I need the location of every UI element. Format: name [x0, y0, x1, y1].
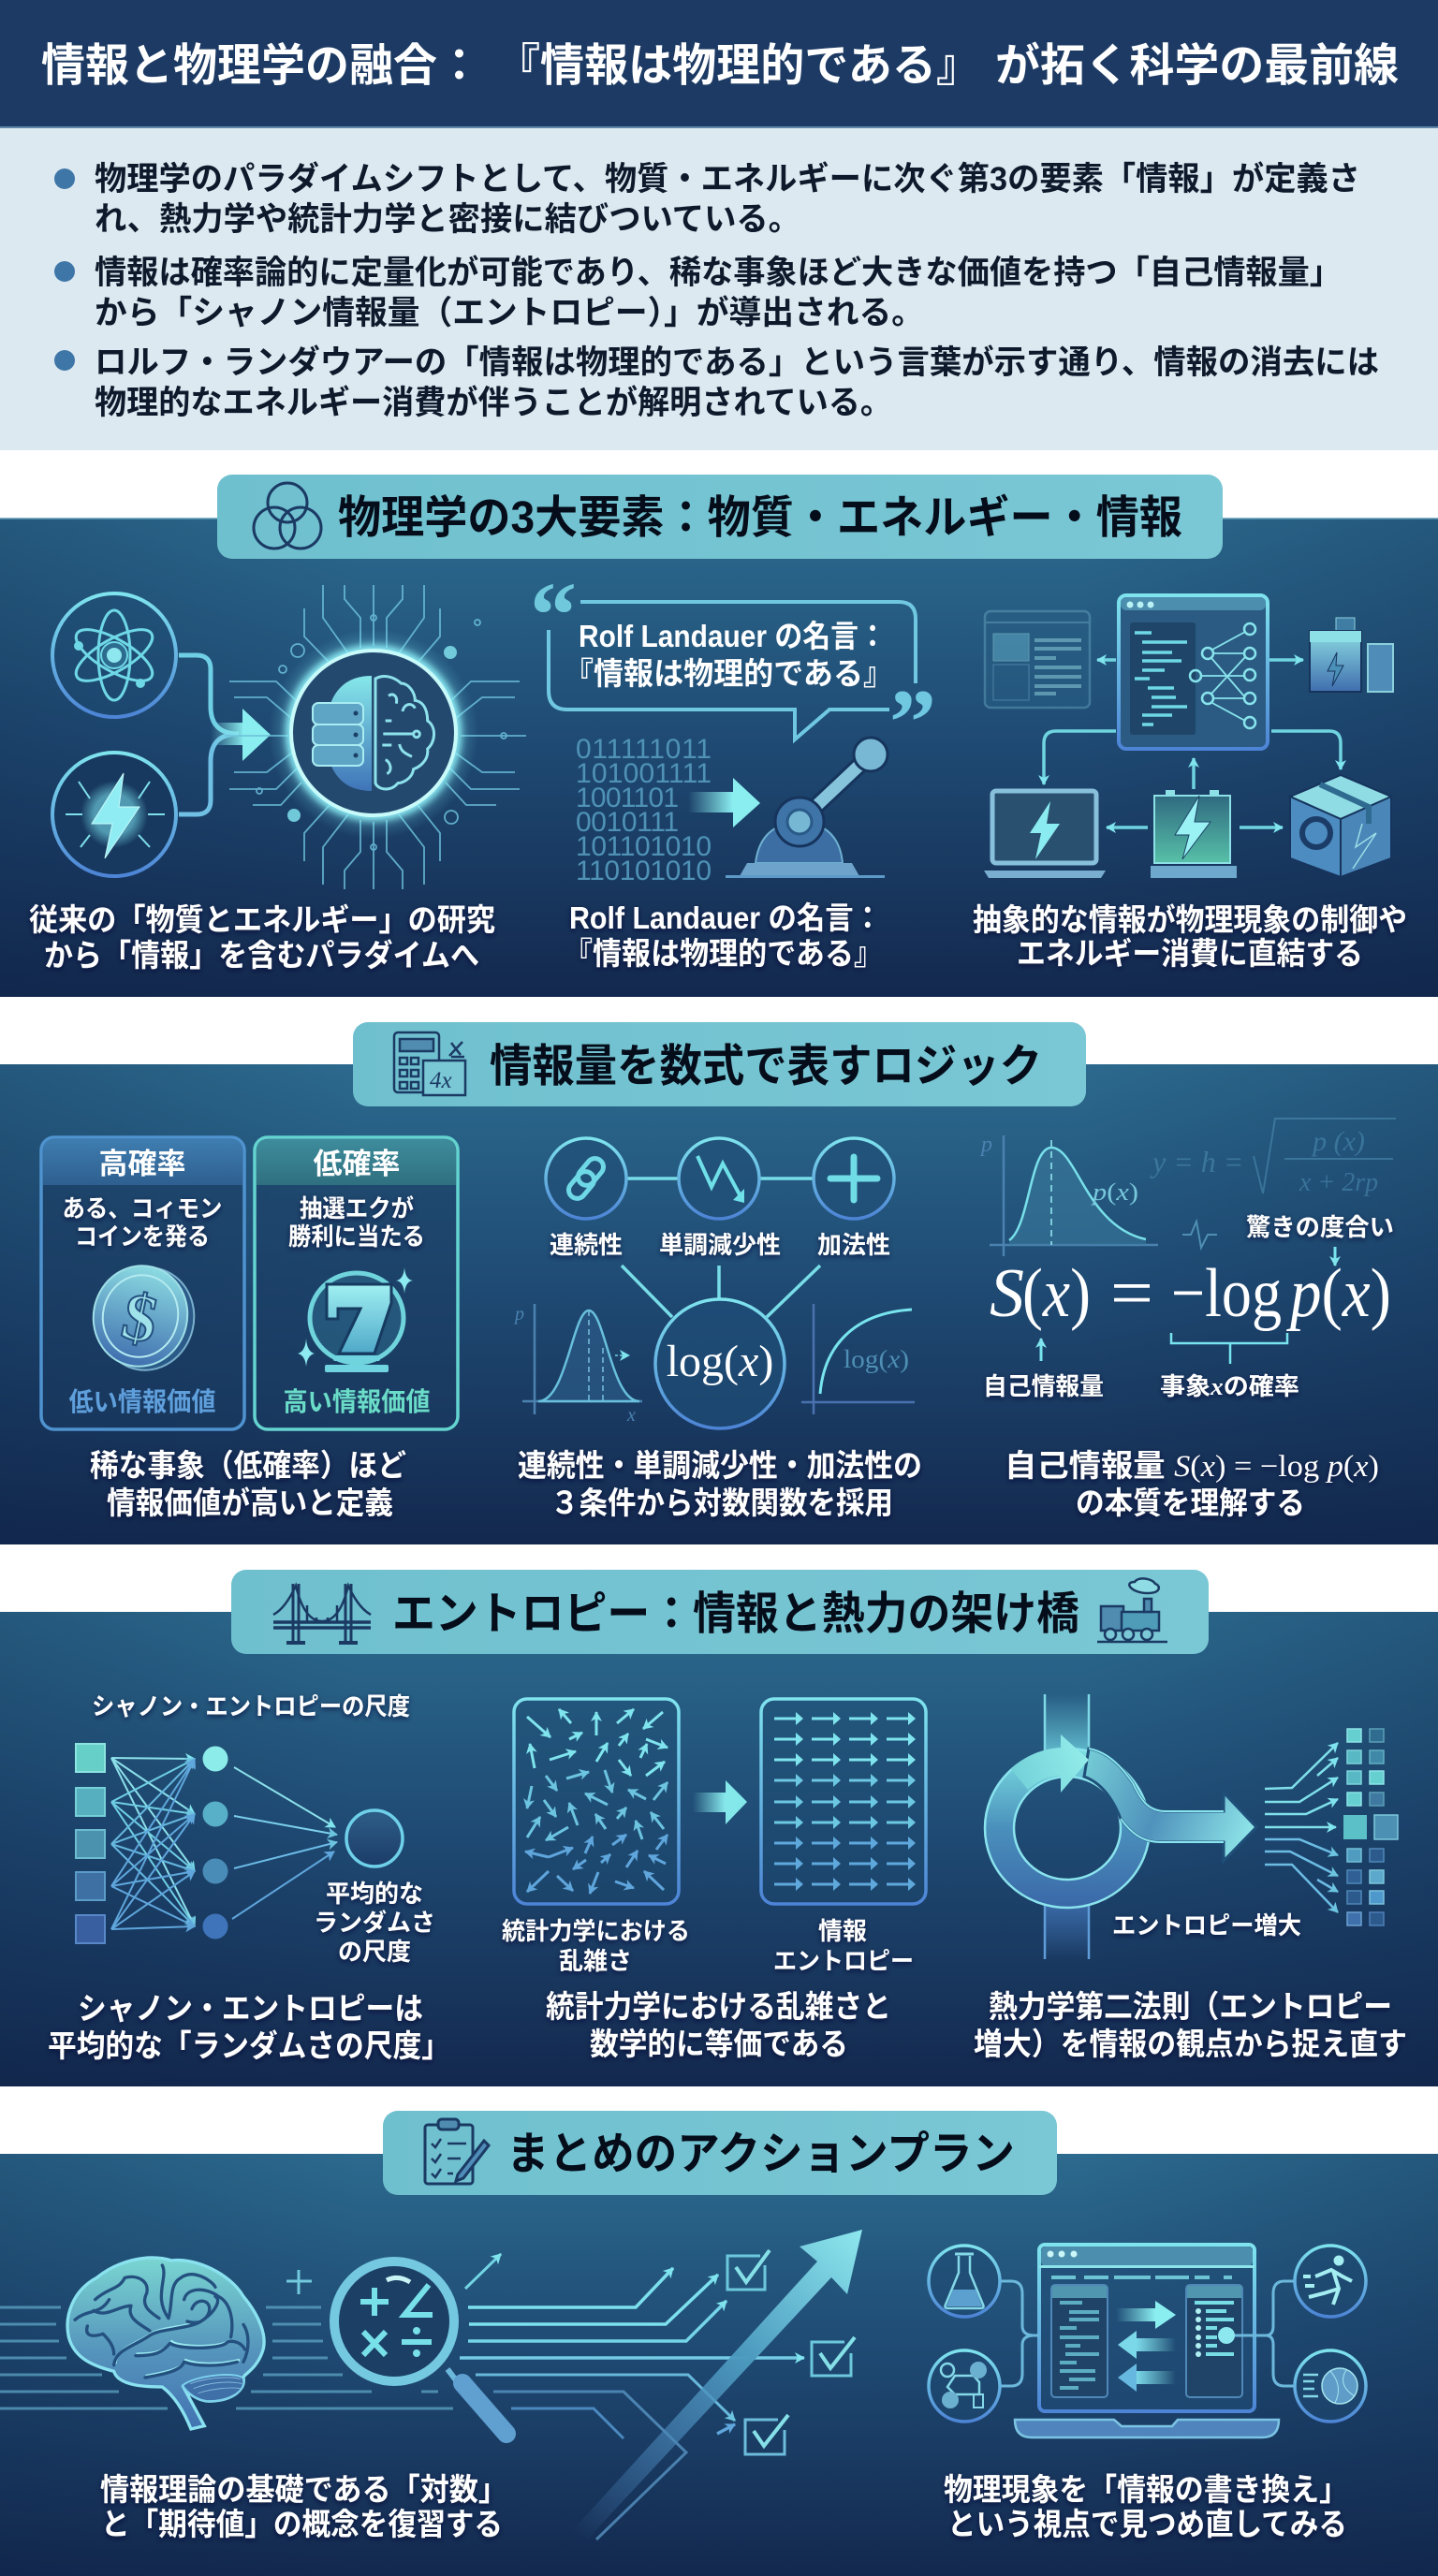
- box: ordered arrows: [761, 1699, 926, 1904]
- caption: equivalence: [546, 1989, 891, 2061]
- bullet 1: [54, 160, 1360, 238]
- section 2 heading pill: [353, 1022, 1086, 1106]
- caption: Shannon entropy: シャノン・エントロピーは: [78, 1991, 423, 2026]
- circuit traces around brain: [225, 585, 526, 889]
- arrow: binary to lever: [688, 778, 760, 827]
- box labels: [502, 1917, 914, 1975]
- chart: bell curve: p: [513, 1304, 524, 1325]
- chart: log curve: log(x): [844, 1345, 909, 1373]
- icon: additive condition: [814, 1138, 894, 1219]
- arrow: surprise to formula: [1333, 1247, 1337, 1266]
- main formula: [990, 1255, 1391, 1332]
- vertical pipes: [1045, 1694, 1089, 1959]
- icon: broken cardboard box: [1290, 775, 1391, 877]
- card description: [288, 1194, 425, 1251]
- bullet 1: 物理学のパラダイムシフトとして、物質・エネルギーに次ぐ第3の要素「情報」が定義さ: [95, 160, 1360, 198]
- icon: molecule circle: [929, 2350, 1000, 2422]
- caption: review log and expectation: [100, 2472, 507, 2541]
- icon: energy lightning circle: [52, 753, 176, 876]
- caption: rewrite viewpoint: [944, 2472, 1348, 2541]
- chart: probability density: p(x): [1091, 1178, 1138, 1206]
- caption: card comparison: [90, 1448, 406, 1520]
- ring exit band: [1084, 1749, 1256, 1861]
- caption: column 2: [564, 900, 883, 971]
- binary digits block: [576, 734, 712, 886]
- icon: magnifying glass with math symbols: [334, 2261, 506, 2434]
- title: [41, 41, 1399, 91]
- diagram: self-information formula: [979, 1119, 1396, 1400]
- caption: log conditions: 連続性・単調減少性・加法性の: [518, 1448, 922, 1483]
- binary digits block: 0010111: [576, 807, 679, 838]
- panel: section 3: [0, 1570, 1438, 2086]
- chart: probability density: p: [979, 1133, 992, 1157]
- title: が拓く科学の最前線: [995, 41, 1399, 91]
- main formula: S: [990, 1255, 1024, 1332]
- output node label: [314, 1880, 435, 1966]
- section 3 heading text: エントロピー：情報と熱力の架け橋: [392, 1589, 1079, 1639]
- caption: column 1: から「情報」を含むパラダイムへ: [44, 938, 479, 973]
- caption: log conditions: ３条件から対数関数を採用: [550, 1486, 893, 1520]
- card: low probability: [255, 1137, 458, 1429]
- icon: laptop rewriting information: [1015, 2245, 1279, 2437]
- caption: Shannon entropy: [48, 1991, 450, 2063]
- binary digits block: 011111011: [576, 734, 712, 765]
- hidden-layer nodes: [202, 1747, 228, 1939]
- caption: card comparison: 情報価値が高いと定義: [107, 1486, 393, 1520]
- icon: brain and database core: [269, 629, 478, 839]
- chart: probability density: [979, 1133, 1158, 1256]
- card: high probability: [41, 1137, 244, 1429]
- callout: speech bubble with quote: 『情報は物理的である』: [564, 656, 893, 691]
- binary digits block: 101001111: [576, 758, 712, 789]
- icon: runner circle: [1295, 2246, 1366, 2317]
- right code pane: [1186, 2285, 1242, 2397]
- page header band: [0, 0, 1438, 128]
- section 3 heading pill: [231, 1570, 1209, 1654]
- icon: laptop with lightning: [984, 791, 1106, 878]
- arrow: left lower: [1118, 2364, 1176, 2392]
- icon: erasure lever: [726, 738, 888, 878]
- caption: rewrite viewpoint: という視点で見つめ直してみる: [947, 2507, 1347, 2541]
- icon: decreasing condition: [679, 1138, 759, 1219]
- caption: column 3: エネルギー消費に直結する: [1017, 936, 1363, 971]
- icon: brain: [67, 2258, 264, 2429]
- section 2 heading text: 情報量を数式で表すロジック: [490, 1042, 1042, 1091]
- arrow: small upward: [465, 2254, 501, 2289]
- icon: atom circle: [52, 593, 176, 717]
- chart: bell curve: [513, 1304, 642, 1426]
- main formula: (x): [1022, 1255, 1091, 1332]
- faded background formula: p (x): [1311, 1126, 1365, 1157]
- icon: coin: $: [116, 1278, 165, 1358]
- panel: summary bullets: [0, 128, 1438, 450]
- network title: シャノン・エントロピーの尺度: [92, 1692, 410, 1720]
- icon: opening quote mark: “: [530, 563, 577, 666]
- section 1 heading text: 物理学の3大要素：物質・エネルギー・情報: [338, 493, 1182, 543]
- card description: 抽選エクが: [300, 1194, 414, 1222]
- arrows: data flow from window: [1044, 660, 1341, 827]
- caption: column 3: 抽象的な情報が物理現象の制御や: [973, 902, 1407, 937]
- ring: [985, 1749, 1150, 1908]
- caption: column 1: [29, 902, 495, 973]
- formula labels: [983, 1372, 1299, 1400]
- card heading: 高確率: [99, 1148, 185, 1180]
- icon: clipboard and pencil: [425, 2119, 489, 2184]
- arrow: left upper: [1118, 2331, 1176, 2359]
- arrows: full mesh: [111, 1758, 337, 1929]
- icon: check box 2: [812, 2337, 855, 2376]
- card description: [62, 1194, 223, 1251]
- condition labels: 単調減少性: [659, 1231, 781, 1259]
- fan-out arrows: [1265, 1743, 1338, 1912]
- log circle: log(x): [667, 1337, 773, 1386]
- icon: chain link condition: [546, 1138, 626, 1219]
- icon: main code window: [1119, 595, 1268, 749]
- caption: second law: 増大）を情報の観点から捉え直す: [974, 2027, 1407, 2061]
- icon: closing quote mark: ”: [889, 670, 936, 774]
- panel: section 2: [0, 1022, 1438, 1544]
- caption: self-information: [1005, 1448, 1379, 1520]
- bullet 3: [54, 344, 1379, 421]
- input squares: [76, 1744, 105, 1943]
- caption: log conditions: [518, 1448, 922, 1520]
- bracket: probability: [1171, 1333, 1287, 1364]
- icon: steam train: [1097, 1578, 1167, 1642]
- card description: 勝利に当たる: [288, 1222, 425, 1251]
- caption: review log and expectation: と「期待値」の概念を復習する: [101, 2507, 503, 2541]
- particle squares: [1343, 1729, 1398, 1925]
- chart: bell curve: x: [626, 1405, 636, 1426]
- caption: column 3: [973, 902, 1407, 971]
- caption: Shannon entropy: 平均的な「ランダムさの尺度」: [48, 2028, 450, 2063]
- card value label: 高い情報価値: [283, 1387, 431, 1416]
- arrow: disorder to order: [693, 1780, 747, 1824]
- arrow: big growth arrow: [571, 2230, 862, 2539]
- caption: second law: 熱力学第二法則（エントロピー: [989, 1989, 1392, 2024]
- main formula: −log: [1171, 1255, 1282, 1332]
- diagram: three conditions to log: [513, 1138, 915, 1428]
- icon: check box 3: [745, 2415, 788, 2454]
- icon: faded window: [985, 611, 1090, 708]
- caption: review log and expectation: 情報理論の基礎である「対数」: [100, 2472, 507, 2507]
- formula glyphs on calculator: 4x: [430, 1068, 452, 1093]
- icon: battery top right: [1310, 618, 1393, 692]
- faded background formula: x + 2rp: [1299, 1168, 1378, 1197]
- bullet 2: [54, 255, 1342, 331]
- diagram: Shannon entropy network: [76, 1692, 435, 1966]
- output node label: 平均的な: [326, 1880, 423, 1908]
- output node: [346, 1810, 403, 1866]
- panel: section 4: [0, 2111, 1438, 2576]
- faded data lines: [0, 2307, 453, 2408]
- caption: self-information: の本質を理解する: [1076, 1486, 1305, 1520]
- chart: log curve: [801, 1304, 915, 1414]
- callout: speech bubble with quote: [530, 563, 936, 774]
- caption: equivalence: 統計力学における乱雑さと: [546, 1989, 891, 2024]
- bullet 2: から「シャノン情報量（エントロピー）」が導出される。: [95, 295, 924, 331]
- condition labels: [550, 1231, 890, 1259]
- section 1 heading pill: [217, 475, 1223, 559]
- arrow: right: [1116, 2301, 1176, 2329]
- title: 情報と物理学の融合：: [41, 41, 481, 91]
- icon: check box 1: [727, 2250, 770, 2290]
- binary digits block: 110101010: [576, 856, 712, 886]
- box labels: 乱雑さ: [559, 1947, 632, 1975]
- caption: card comparison: 稀な事象（低確率）ほど: [90, 1448, 406, 1483]
- caption: rewrite viewpoint: 物理現象を「情報の書き換え」: [944, 2472, 1348, 2507]
- card value label: 低い情報価値: [69, 1387, 215, 1416]
- output node label: ランダムさ: [314, 1909, 435, 1937]
- bullet 3: ロルフ・ランダウアーの「情報は物理的である」という言葉が示す通り、情報の消去には: [95, 344, 1379, 381]
- icon: lucky seven: [298, 1267, 413, 1372]
- arrow: self-information pointer: [1039, 1339, 1043, 1361]
- formula labels: 事象xの確率: [1160, 1372, 1299, 1400]
- condition labels: 加法性: [817, 1231, 890, 1259]
- connectors to circles: [1001, 2281, 1294, 2386]
- icon: three overlapping circles: [254, 483, 321, 549]
- caption: equivalence: 数学的に等価である: [590, 2027, 848, 2061]
- card description: ある、コィモン: [62, 1194, 223, 1222]
- bullet 2: 情報は確率論的に定量化が可能であり、稀な事象ほど大きな価値を持つ「自己情報量」: [95, 255, 1342, 291]
- box labels: 統計力学における: [502, 1917, 690, 1945]
- diagram: second law cycle: [985, 1694, 1398, 1959]
- caption: column 2: Rolf Landauer の名言：: [569, 900, 882, 935]
- icon: plus sign: [286, 2270, 312, 2294]
- icon: coin: [82, 1256, 205, 1380]
- icon: charging battery: [1151, 790, 1237, 878]
- icon: flask circle: [929, 2246, 1000, 2317]
- box labels: 情報: [818, 1917, 867, 1945]
- icon: pulse: [1182, 1222, 1217, 1248]
- caption: column 2: 『情報は物理的である』: [564, 936, 883, 971]
- icon: moving planet circle: [1295, 2350, 1366, 2422]
- caption: column 1: 従来の「物質とエネルギー」の研究: [29, 902, 495, 937]
- label: surprise: 驚きの度合い: [1246, 1213, 1394, 1241]
- icon: calculator and formula: [394, 1032, 465, 1095]
- arrow: matter and energy merge: [179, 655, 271, 814]
- icon: suspension bridge: [273, 1584, 371, 1643]
- output node label: の尺度: [338, 1938, 411, 1966]
- binary digits block: 1001101: [576, 783, 679, 813]
- box labels: エントロピー: [773, 1947, 914, 1975]
- left code pane: [1051, 2285, 1108, 2397]
- label: entropy increase: エントロピー増大: [1112, 1911, 1301, 1939]
- card heading: 低確率: [313, 1148, 401, 1180]
- diagram: information and physical devices: [29, 595, 1407, 973]
- condition labels: 連続性: [550, 1231, 623, 1259]
- section 4 heading text: まとめのアクションプラン: [506, 2130, 1015, 2179]
- bullet 3: 物理的なエネルギー消費が伴うことが解明されている。: [95, 385, 892, 421]
- ring arrowhead: [1011, 1734, 1089, 1793]
- log circle: [655, 1299, 785, 1428]
- card description: コインを発る: [75, 1222, 210, 1251]
- bullet 1: れ、熱力学や統計力学と密接に結びついている。: [95, 201, 800, 238]
- box: disordered arrows: [514, 1699, 679, 1904]
- quote text: Rolf Landauer の名言：: [579, 619, 887, 653]
- section 4 heading pill: [383, 2111, 1057, 2195]
- faded background formula: y = h =: [1150, 1145, 1243, 1178]
- caption: second law: [974, 1989, 1407, 2061]
- formula labels: 自己情報量: [983, 1372, 1104, 1400]
- binary digits block: 101101010: [576, 831, 712, 862]
- faded background formula: [1150, 1119, 1396, 1197]
- arrows: branching data lines: [460, 2268, 804, 2539]
- title: 『情報は物理的である』: [496, 41, 980, 91]
- main formula: =: [1110, 1255, 1153, 1332]
- main formula: p(x): [1285, 1255, 1391, 1332]
- caption: self-information: 自己情報量 S(x) = −log p(x): [1005, 1448, 1379, 1484]
